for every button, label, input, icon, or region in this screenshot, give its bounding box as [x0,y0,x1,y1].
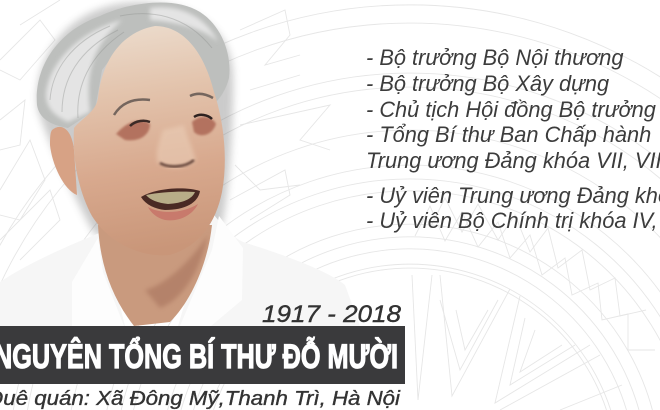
portrait soft shadow [37,2,233,235]
right eye [192,117,216,135]
teeth [146,192,195,204]
hair highlight [46,7,218,122]
career list: Trung ương Đảng khóa VII, VIII [366,148,660,173]
career list: - Bộ trưởng Bộ Nội thương [366,45,624,70]
career list [366,45,660,233]
face [74,26,225,255]
nose [157,125,196,168]
career list: - Bộ trưởng Bộ Xây dựng [366,71,609,96]
lower lip [148,204,198,220]
career list: - Tổng Bí thư Ban Chấp hành [366,122,651,147]
career list: - Chủ tịch Hội đồng Bộ trưởng [366,97,656,122]
hair [37,2,230,128]
hair strands [50,14,212,118]
neck [98,225,212,326]
shirt collar [72,216,243,326]
portrait photo [0,2,360,326]
left eyebrow [114,100,150,115]
left eye [116,121,150,140]
shirt [0,212,360,326]
neck fold [145,235,208,308]
title banner [0,326,405,384]
ear [50,127,77,195]
mouth [141,188,200,210]
title: NGUYÊN TỔNG BÍ THƯ ĐỖ MƯỜI [0,338,398,376]
right eyebrow [190,94,213,98]
dates: 1917 - 2018 [262,301,401,328]
